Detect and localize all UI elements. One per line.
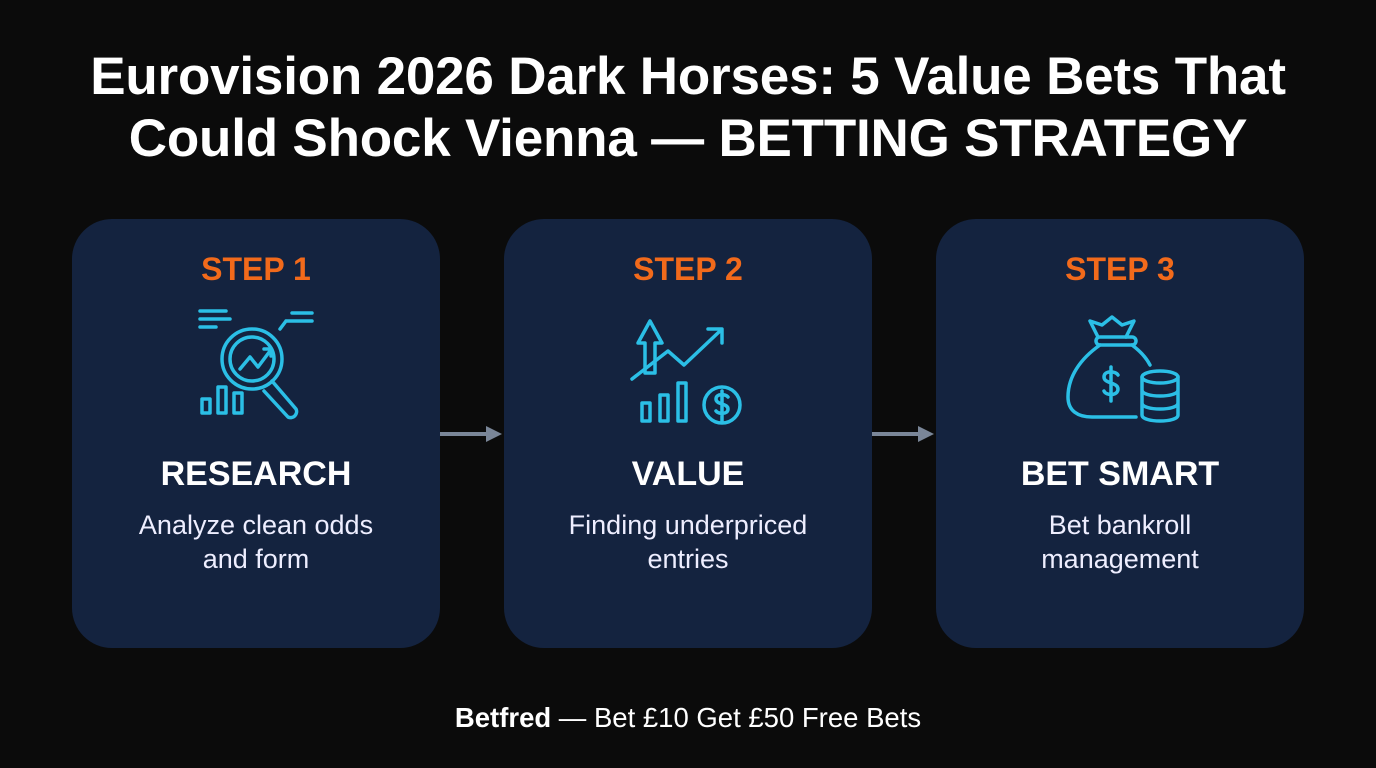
- panel: step 3: [936, 219, 1304, 648]
- panel: step 2: [504, 219, 872, 648]
- description: [569, 510, 807, 574]
- description: and form: [203, 544, 309, 574]
- step 3 label: STEP 3: [1065, 251, 1175, 287]
- description: Finding underpriced: [569, 510, 807, 540]
- step 2 label: STEP 2: [633, 251, 743, 287]
- heading: RESEARCH: [161, 455, 351, 493]
- title: Could Shock Vienna — BETTING STRATEGY: [129, 109, 1247, 168]
- description: Analyze clean odds: [139, 510, 373, 540]
- title: [90, 47, 1286, 168]
- description: Bet bankroll: [1049, 510, 1191, 540]
- footer promo: Betfred — Bet £10 Get £50 Free Bets: [455, 702, 921, 733]
- description: entries: [647, 544, 729, 574]
- icon: magnifier chart: [198, 309, 314, 420]
- icon: growth chart: [630, 319, 742, 425]
- description: [1041, 510, 1199, 574]
- heading: BET SMART: [1021, 455, 1219, 493]
- panel: step 1: [72, 219, 440, 648]
- arrow 1: [440, 426, 502, 442]
- arrow 2: [872, 426, 934, 442]
- description: [139, 510, 373, 574]
- icon: money bag and coins: [1066, 315, 1180, 423]
- description: management: [1041, 544, 1199, 574]
- heading: VALUE: [632, 455, 744, 493]
- step 1 label: STEP 1: [201, 251, 311, 287]
- title: Eurovision 2026 Dark Horses: 5 Value Bets That: [90, 47, 1286, 106]
